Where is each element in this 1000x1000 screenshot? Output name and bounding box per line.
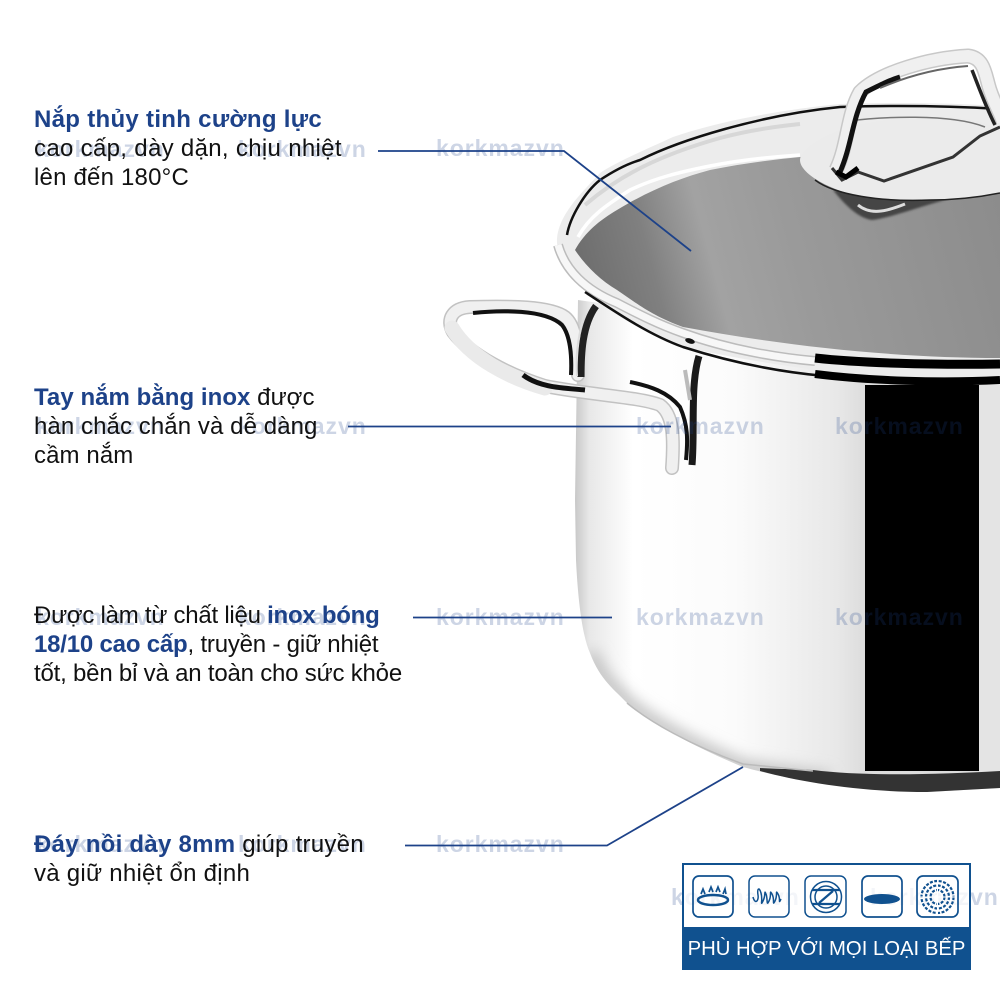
callout line: material bbox=[413, 616, 612, 618]
dark reflection stripe bbox=[865, 385, 979, 771]
watermark: korkmazvn bbox=[436, 135, 565, 161]
watermark: korkmazvn bbox=[436, 604, 565, 630]
icon: coil bbox=[749, 876, 789, 917]
watermark: korkmazvn bbox=[835, 604, 964, 630]
lid knob bbox=[800, 56, 1000, 220]
watermark: korkmazvn bbox=[636, 413, 765, 439]
text: base: và giữ nhiệt ổn định bbox=[34, 860, 250, 887]
icon: hotplate bbox=[862, 876, 902, 917]
text: handle: Tay nắm bằng inox được bbox=[34, 384, 315, 411]
watermark: korkmazvn bbox=[636, 604, 765, 630]
watermark: korkmazvn bbox=[36, 831, 165, 857]
glass lid bbox=[557, 103, 1000, 385]
reflection under knob bbox=[833, 190, 945, 220]
text: lid bbox=[34, 105, 342, 191]
knob loop bbox=[836, 56, 1000, 170]
lid rim lines bbox=[567, 106, 1000, 235]
watermark: korkmazvn bbox=[870, 884, 999, 910]
text: lid: lên đến 180°C bbox=[34, 164, 189, 191]
base ring bbox=[760, 768, 1000, 792]
text: material: Được làm từ chất liệu inox bóng bbox=[34, 602, 380, 629]
watermark: korkmazvn bbox=[238, 604, 367, 630]
watermark: korkmazvn bbox=[36, 413, 165, 439]
side handle bbox=[450, 306, 699, 468]
watermark: korkmazvn bbox=[835, 413, 964, 439]
pot body bbox=[575, 300, 1000, 792]
watermark: korkmazvn bbox=[238, 413, 367, 439]
callout line: base bbox=[405, 767, 743, 846]
text: handle: hàn chắc chắn và dễ dàng bbox=[34, 413, 317, 440]
badge: suitable for all stoves bbox=[682, 863, 971, 970]
callout line: handle bbox=[348, 426, 671, 428]
knob plate bbox=[800, 117, 1000, 200]
watermark: korkmazvn bbox=[36, 604, 165, 630]
text: material: tốt, bền bỉ và an toàn cho sức khỏe bbox=[34, 660, 402, 687]
watermark bbox=[36, 135, 999, 910]
text: base: Đáy nồi dày 8mm giúp truyền bbox=[34, 831, 364, 858]
text: lid: cao cấp, dày dặn, chịu nhiệt bbox=[34, 135, 342, 162]
icon: induction bbox=[805, 876, 846, 917]
watermark: korkmazvn bbox=[436, 831, 565, 857]
text: material: 18/10 cao cấp, truyền - giữ nhiệt bbox=[34, 631, 378, 658]
text: handle: cầm nắm bbox=[34, 442, 133, 469]
watermark: korkmazvn bbox=[238, 831, 367, 857]
stove label: PHÙ HỢP VỚI MỌI LOẠI BẾP bbox=[688, 937, 965, 960]
text: material bbox=[34, 602, 402, 687]
watermark: korkmazvn bbox=[238, 136, 367, 162]
callout line: lid bbox=[378, 151, 691, 251]
watermark: korkmazvn bbox=[36, 136, 165, 162]
icon: radiant bbox=[917, 876, 958, 917]
watermark: korkmazvn bbox=[671, 884, 800, 910]
icon: gas bbox=[693, 876, 733, 917]
text: handle bbox=[34, 383, 317, 469]
text: lid: Nắp thủy tinh cường lực bbox=[34, 106, 322, 133]
text: base bbox=[34, 831, 364, 887]
